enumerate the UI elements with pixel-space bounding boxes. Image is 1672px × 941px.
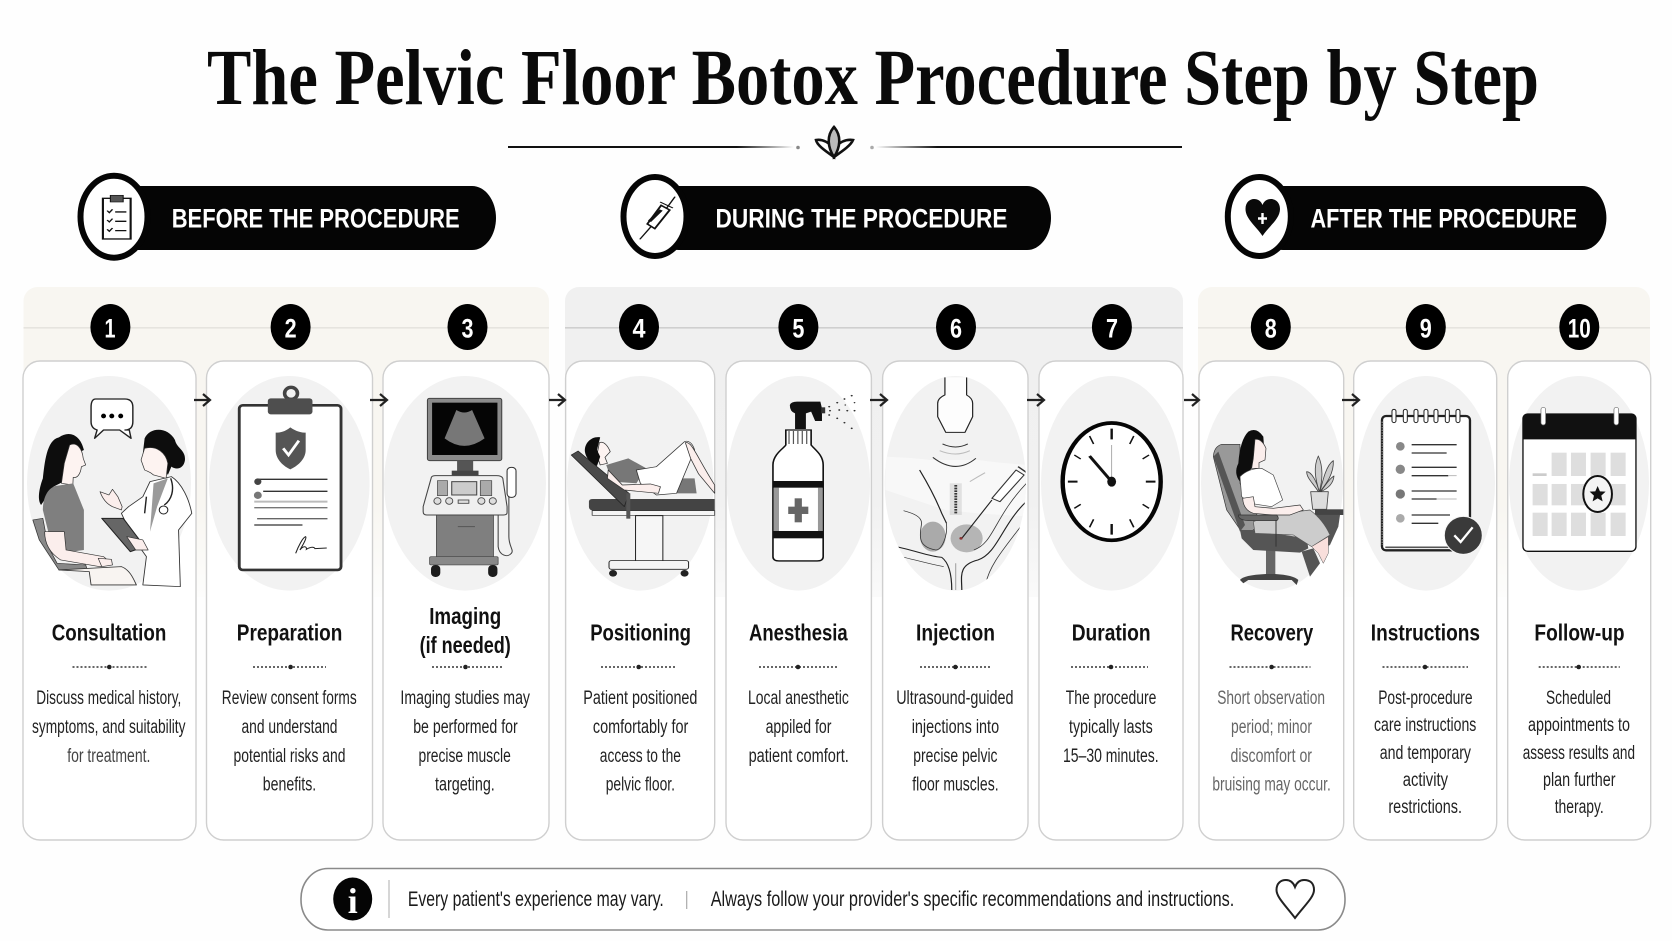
dotted divider bbox=[1230, 665, 1310, 669]
description: precise pelvic bbox=[913, 746, 998, 767]
title: duration: Duration bbox=[1072, 620, 1151, 646]
step 5: anesthesia bbox=[726, 304, 871, 840]
description: access to the bbox=[600, 746, 681, 767]
title: instructions: Instructions bbox=[1371, 620, 1480, 646]
number badge 8 bbox=[1251, 304, 1291, 350]
title: preparation: Preparation bbox=[237, 620, 342, 646]
arrows between steps bbox=[194, 394, 1359, 406]
illustration: calendar with star bbox=[1523, 407, 1636, 551]
title: positioning: Positioning bbox=[590, 620, 691, 646]
section header: before the procedure: BEFORE THE PROCEDURE bbox=[172, 204, 460, 234]
description: pelvic floor. bbox=[606, 775, 675, 796]
number badge 5 bbox=[778, 304, 818, 350]
icon: clipboard checklist bbox=[103, 195, 131, 239]
description: appointments to bbox=[1528, 715, 1630, 736]
number badge 7: 7 bbox=[1106, 313, 1118, 343]
description bbox=[1523, 688, 1635, 818]
description: Scheduled bbox=[1546, 688, 1611, 709]
description bbox=[32, 688, 186, 767]
section header: after the procedure: AFTER THE PROCEDURE bbox=[1310, 204, 1577, 234]
illustration: patient on exam table bbox=[571, 437, 715, 577]
title: imaging if needed: Imaging bbox=[429, 603, 501, 629]
description: Review consent forms bbox=[222, 688, 357, 709]
description bbox=[748, 688, 849, 767]
title divider with lotus bbox=[508, 127, 1182, 157]
number badge 4: 4 bbox=[632, 313, 646, 343]
number badge 2 bbox=[271, 304, 311, 350]
description: targeting. bbox=[435, 775, 495, 796]
description: care instructions bbox=[1374, 715, 1476, 736]
number badge 4 bbox=[619, 304, 659, 350]
number badge 9 bbox=[1406, 304, 1446, 350]
description: and temporary bbox=[1380, 743, 1471, 764]
description bbox=[222, 688, 357, 796]
description bbox=[400, 688, 530, 796]
title: imaging if needed bbox=[420, 603, 511, 658]
title: anesthesia: Anesthesia bbox=[749, 620, 848, 646]
title: injection: Injection bbox=[916, 620, 995, 646]
dotted divider bbox=[601, 665, 675, 669]
illustration: ultrasound-guided injection anatomy bbox=[898, 377, 1026, 590]
number badge 2: 2 bbox=[285, 313, 297, 343]
description: be performed for bbox=[413, 717, 518, 738]
step 10: follow-up bbox=[1508, 304, 1651, 840]
footer note bbox=[301, 868, 1345, 930]
description: patient comfort. bbox=[749, 746, 849, 767]
dotted divider bbox=[72, 665, 147, 669]
description: activity bbox=[1403, 770, 1448, 791]
dotted divider bbox=[759, 665, 837, 669]
section header: before the procedure bbox=[80, 176, 496, 258]
step 1: consultation bbox=[23, 304, 196, 840]
illustration: patient and doctor talking bbox=[33, 399, 192, 587]
dotted divider bbox=[920, 665, 992, 669]
description: floor muscles. bbox=[912, 775, 999, 796]
number badge 1: 1 bbox=[104, 313, 116, 343]
number badge 1 bbox=[90, 304, 130, 350]
description bbox=[896, 688, 1014, 796]
title: consultation: Consultation bbox=[52, 620, 166, 646]
description: injections into bbox=[912, 717, 999, 738]
number badge 8: 8 bbox=[1265, 313, 1277, 343]
panel: before the procedure bbox=[23, 287, 549, 840]
description: bruising may occur. bbox=[1212, 775, 1331, 796]
illustration: anesthetic spray bottle bbox=[773, 395, 856, 561]
description: The procedure bbox=[1066, 688, 1156, 709]
number badge 10: 10 bbox=[1568, 313, 1591, 343]
description: Discuss medical history, bbox=[36, 688, 181, 709]
icon: info: i bbox=[348, 881, 358, 921]
step 4: positioning bbox=[566, 304, 715, 840]
icon: syringe bbox=[640, 197, 675, 239]
footer text: provider recommendations: Always follow your provider's specific recommendations and instructions. bbox=[711, 888, 1234, 911]
illustration: ultrasound machine bbox=[423, 398, 516, 577]
description bbox=[1063, 688, 1159, 767]
number badge 10 bbox=[1559, 304, 1599, 350]
number badge 5: 5 bbox=[792, 313, 804, 343]
section header: after the procedure bbox=[1228, 177, 1606, 256]
dotted divider bbox=[253, 665, 326, 669]
icon: info bbox=[333, 878, 372, 921]
section header: during the procedure: DURING THE PROCEDURE bbox=[716, 204, 1008, 234]
description: and understand bbox=[242, 717, 338, 738]
description: therapy. bbox=[1555, 797, 1604, 818]
description bbox=[1212, 688, 1331, 796]
icon: heart with plus bbox=[1246, 199, 1280, 236]
icon: heart outline bbox=[1276, 880, 1314, 918]
number badge 6 bbox=[936, 304, 976, 350]
description: discomfort or bbox=[1230, 746, 1312, 767]
illustration: clock bbox=[1063, 423, 1161, 540]
description: potential risks and bbox=[234, 746, 346, 767]
illustration: notebook checklist bbox=[1382, 409, 1482, 554]
description: Short observation bbox=[1217, 688, 1325, 709]
description: period; minor bbox=[1231, 717, 1312, 738]
number badge 9: 9 bbox=[1420, 313, 1432, 343]
dotted divider bbox=[432, 665, 502, 669]
panel: after the procedure bbox=[1198, 287, 1651, 840]
section header: during the procedure bbox=[624, 177, 1051, 256]
number badge 3 bbox=[448, 304, 488, 350]
step 3: imaging bbox=[383, 304, 549, 840]
description bbox=[1374, 688, 1476, 818]
step 6: injection bbox=[883, 304, 1030, 840]
description: Post-procedure bbox=[1378, 688, 1473, 709]
number badge 6: 6 bbox=[950, 313, 962, 343]
description: Local anesthetic bbox=[748, 688, 849, 709]
number badge 7 bbox=[1092, 304, 1132, 350]
description: benefits. bbox=[263, 775, 316, 796]
description: restrictions. bbox=[1388, 797, 1462, 818]
step 8: recovery bbox=[1199, 304, 1344, 840]
number badge 3: 3 bbox=[462, 313, 474, 343]
dotted divider bbox=[1382, 665, 1468, 669]
illustration: patient resting in chair bbox=[1213, 430, 1343, 585]
dotted divider bbox=[1071, 665, 1148, 669]
description: Patient positioned bbox=[583, 688, 697, 709]
title: follow-up: Follow-up bbox=[1534, 620, 1625, 646]
description: typically lasts bbox=[1069, 717, 1153, 738]
footer text: patient experience: Every patient's experience may vary. bbox=[408, 888, 664, 911]
illustration: consent form clipboard bbox=[239, 387, 341, 570]
description: precise muscle bbox=[418, 746, 511, 767]
title: imaging if needed: (if needed) bbox=[420, 632, 511, 658]
description: for treatment. bbox=[67, 746, 150, 767]
description: 15–30 minutes. bbox=[1063, 746, 1159, 767]
description: Ultrasound-guided bbox=[896, 688, 1014, 709]
description: symptoms, and suitability bbox=[32, 717, 186, 738]
panel: during the procedure bbox=[565, 287, 1183, 840]
description: comfortably for bbox=[593, 717, 689, 738]
description: Imaging studies may bbox=[400, 688, 530, 709]
step 2: preparation bbox=[206, 304, 372, 840]
description bbox=[583, 688, 697, 796]
dotted divider bbox=[1539, 665, 1620, 669]
step 7: duration bbox=[1039, 304, 1183, 840]
description: appiled for bbox=[766, 717, 832, 738]
description: plan further bbox=[1543, 770, 1616, 791]
title: recovery: Recovery bbox=[1230, 620, 1313, 646]
step 9: instructions bbox=[1354, 304, 1497, 840]
